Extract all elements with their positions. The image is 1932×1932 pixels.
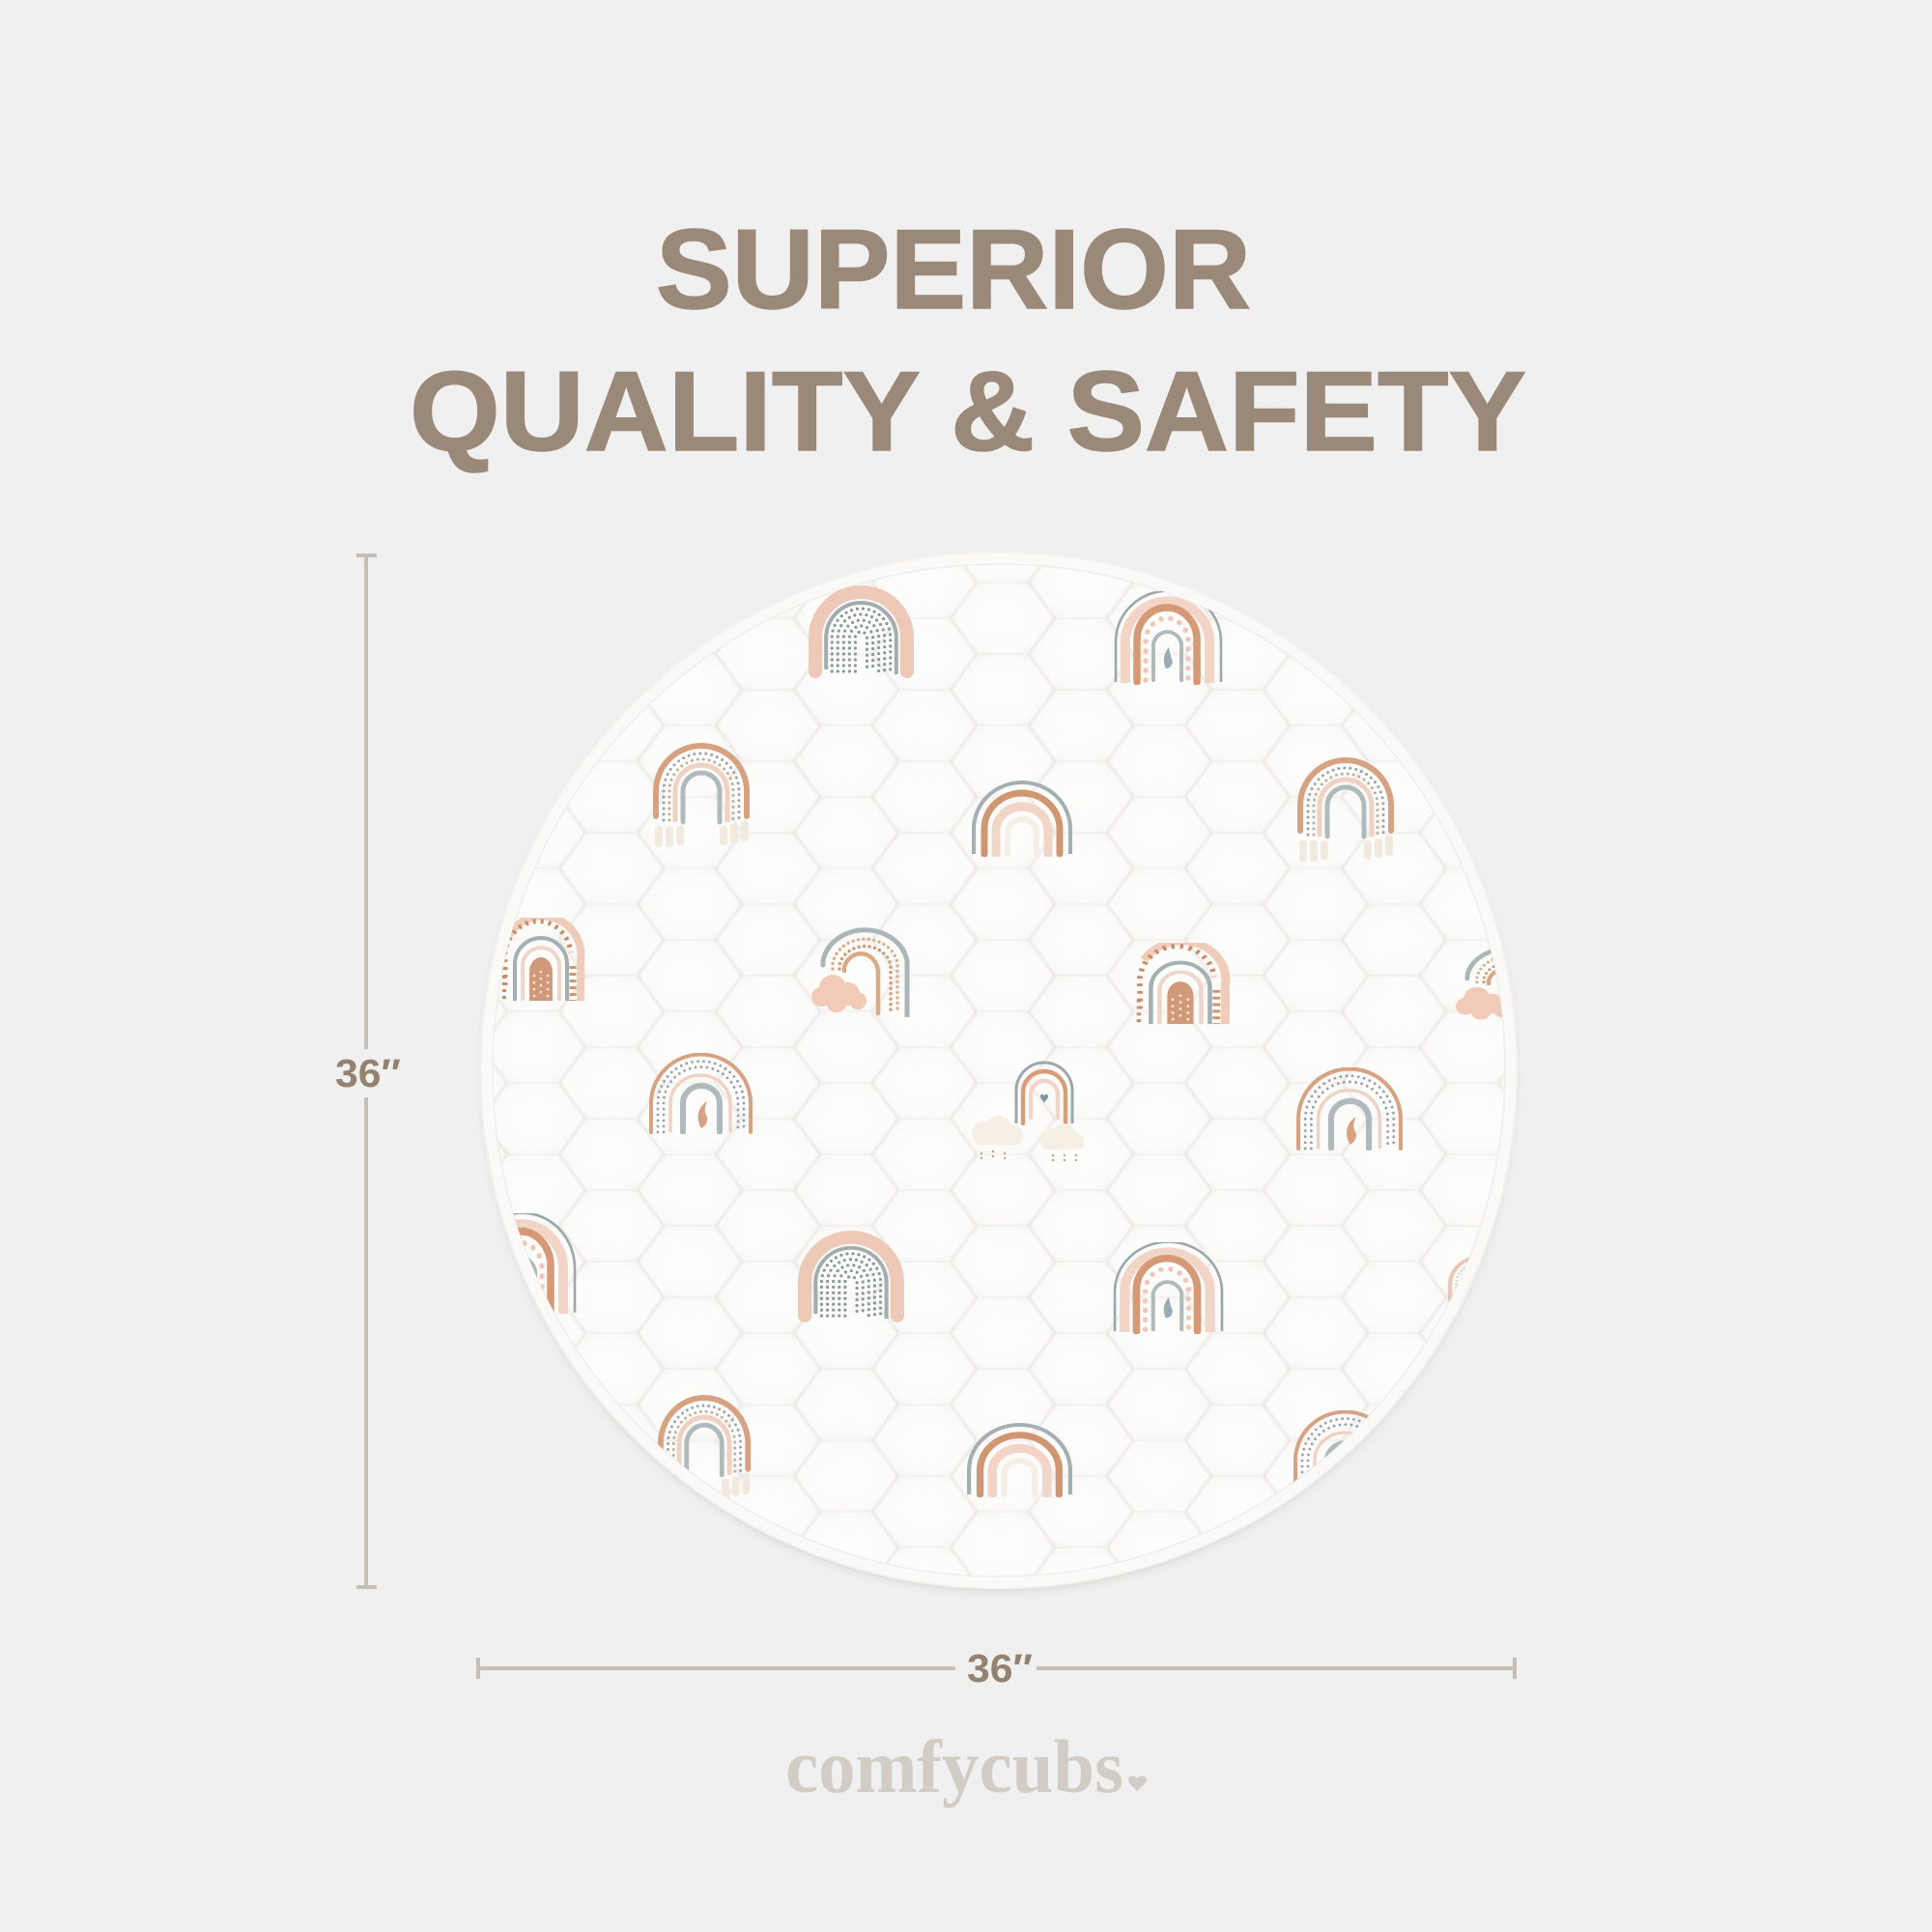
rainbow: bottom right edge bbox=[1293, 1410, 1369, 1482]
rainbows print bbox=[469, 591, 1551, 1500]
logo: comfycubs bbox=[785, 1724, 1123, 1808]
rainbow: lower left edge bbox=[513, 1213, 576, 1314]
rainbow: moon dots right bbox=[1298, 1069, 1401, 1149]
rainbow: bottom left bbox=[660, 1398, 750, 1500]
rainbow: tasselled right bbox=[1299, 760, 1393, 862]
rainbow: lower moon bbox=[1115, 1242, 1222, 1332]
vertical dimension label: 36″ bbox=[335, 1051, 401, 1095]
play mat bbox=[469, 553, 1551, 1590]
rainbow: faint right edge bbox=[1447, 1257, 1469, 1302]
rainbow: large pink dotted bbox=[805, 1237, 897, 1319]
rainbow: top left dotted bbox=[815, 592, 907, 674]
title: QUALITY & SAFETY bbox=[410, 348, 1526, 474]
horizontal dimension label: 36″ bbox=[967, 1646, 1033, 1690]
rainbow: right edge cloud bbox=[1456, 949, 1502, 1020]
rainbow: centre sun bbox=[974, 782, 1070, 854]
rainbow: tasselled left bbox=[655, 746, 749, 847]
title bbox=[410, 206, 1526, 474]
rainbow: top right moon bbox=[1116, 591, 1221, 683]
vertical dimension line bbox=[356, 555, 377, 1587]
title: SUPERIOR bbox=[656, 206, 1251, 332]
rainbow: right leaf bbox=[1139, 941, 1226, 1024]
rainbow: centre cloud bbox=[811, 930, 907, 1017]
rainbow: left leaf bbox=[504, 916, 581, 1001]
rainbow: bottom centre bbox=[969, 1425, 1070, 1494]
rainbow: moon dots left bbox=[651, 1055, 751, 1132]
rainbow: small with clouds bbox=[972, 1063, 1084, 1164]
horizontal dimension line bbox=[478, 1658, 1515, 1679]
